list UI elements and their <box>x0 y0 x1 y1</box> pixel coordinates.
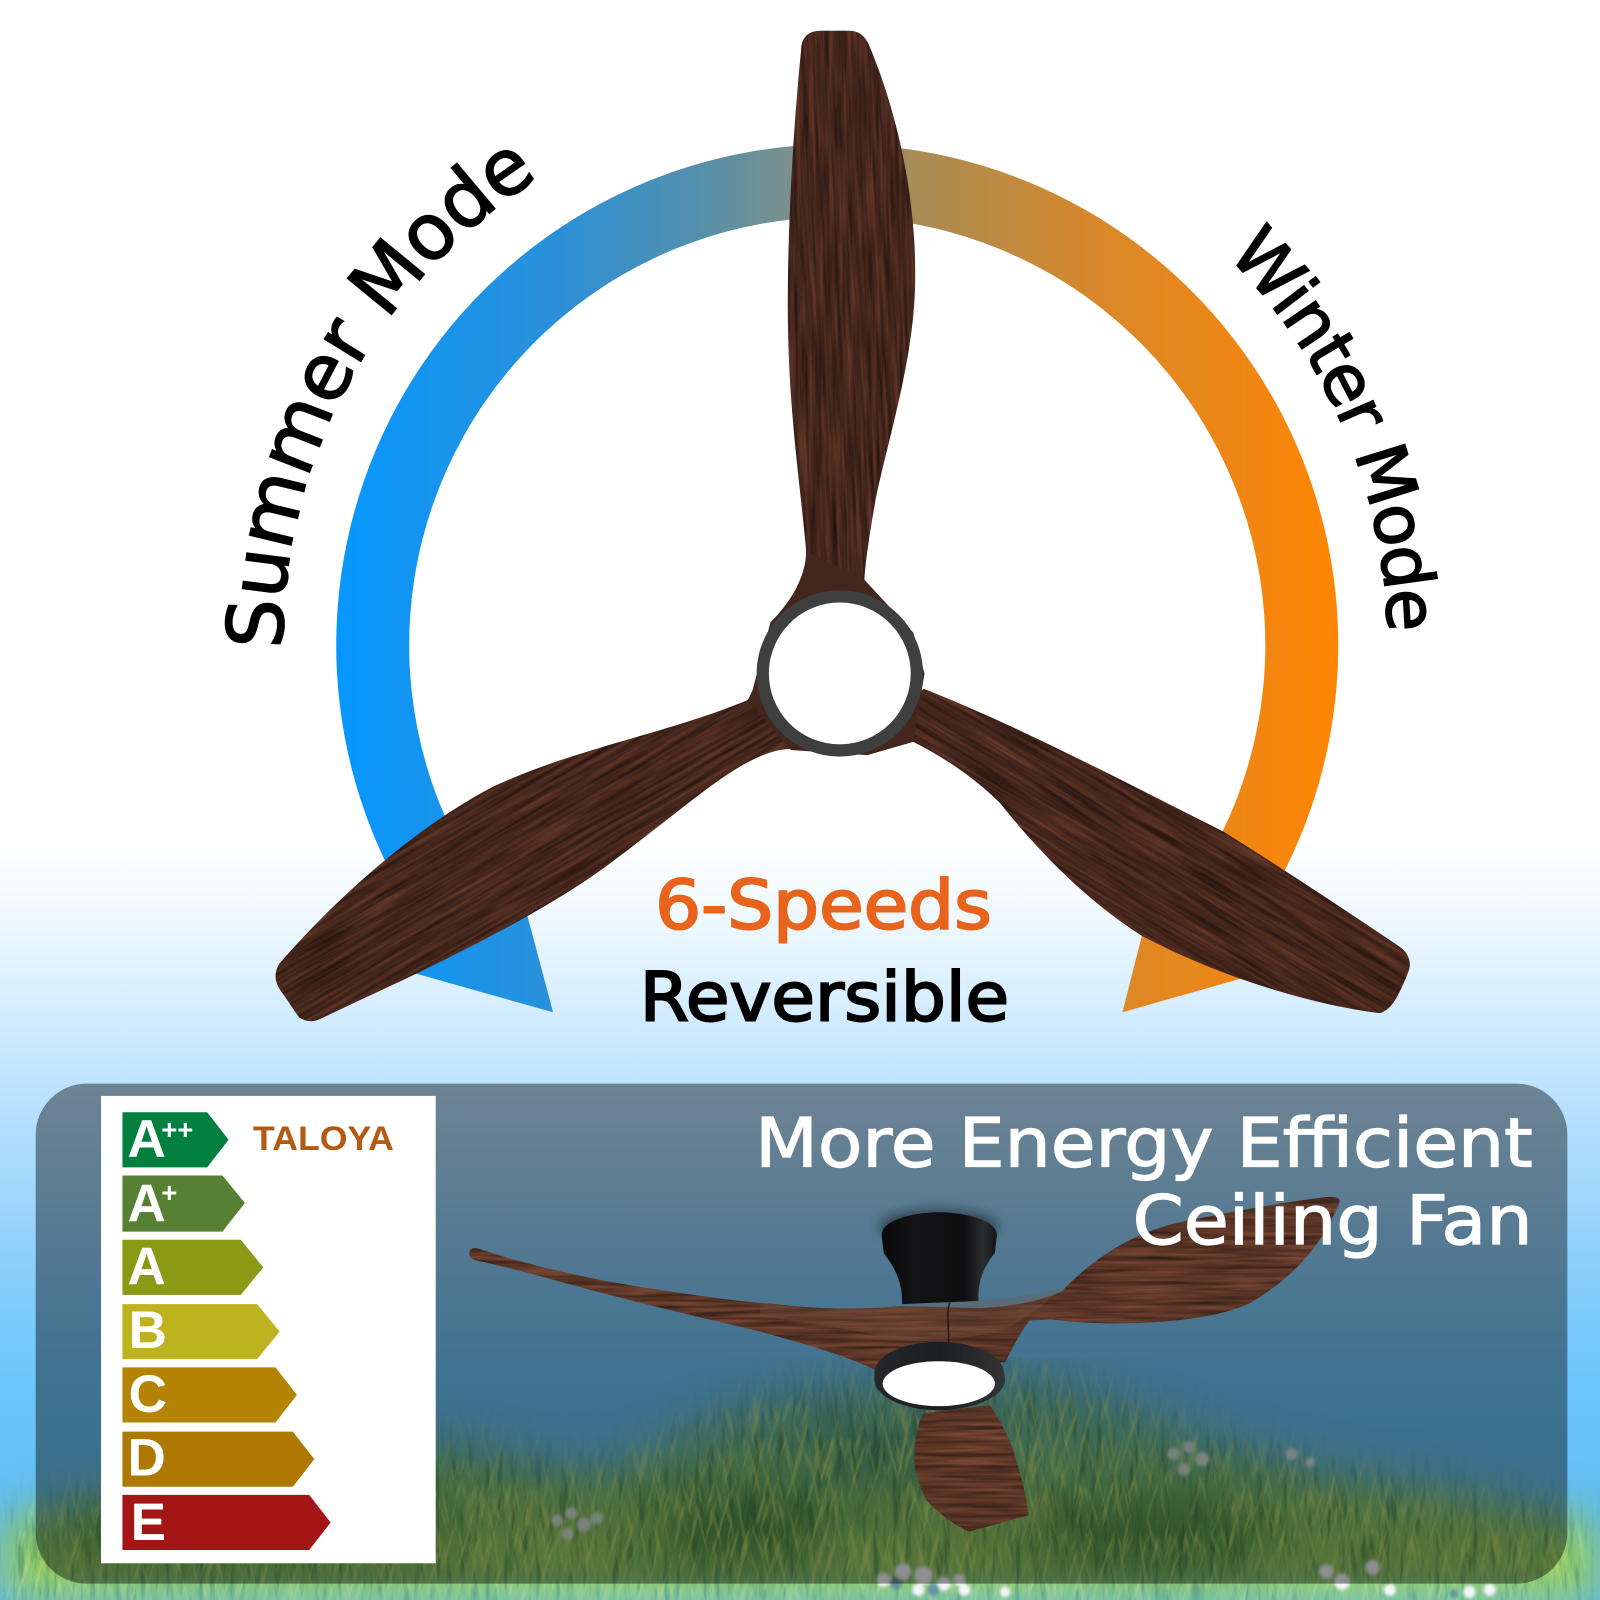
rating A++: A <box>128 1110 166 1169</box>
rating A <box>122 1238 263 1297</box>
rating D: D <box>128 1429 166 1488</box>
gradient mode ring with arrow ends <box>336 144 1338 1012</box>
label: Winter Mode: Winter Mode <box>1236 221 1438 629</box>
light disc <box>883 1361 995 1406</box>
flowers <box>551 1441 1496 1598</box>
side view ceiling fan <box>469 1196 1340 1532</box>
rating A+ <box>122 1174 245 1233</box>
rating B: B <box>129 1301 167 1360</box>
label: 6-Speeds: 6-Speeds <box>655 866 992 945</box>
hub seam <box>948 1302 950 1362</box>
blade: lower right <box>913 688 1410 1014</box>
rating A: A <box>128 1238 166 1297</box>
rating D <box>122 1429 314 1488</box>
blades <box>469 1196 1340 1532</box>
energy rating label card <box>101 1096 436 1563</box>
light cylinder <box>874 1342 1005 1410</box>
brand TALOYA: TALOYA <box>253 1120 394 1158</box>
hub wood body <box>750 551 924 755</box>
rating B <box>122 1301 280 1360</box>
rating A+: + <box>161 1177 177 1208</box>
hub ring and light <box>763 596 917 751</box>
canopy shadow <box>880 1210 998 1243</box>
grass hill scene <box>0 1357 1600 1600</box>
label: Reversible: Reversible <box>640 957 1009 1036</box>
rating A++: ++ <box>161 1114 193 1145</box>
rating C: C <box>129 1365 167 1424</box>
rating A+: A <box>128 1174 166 1233</box>
blade: top <box>788 30 916 580</box>
label: Summer Mode: Summer Mode <box>224 150 534 644</box>
blade: lower left <box>276 690 790 1022</box>
top view fan <box>155 0 1538 1162</box>
hub wood highlight <box>760 1288 1060 1341</box>
rating C <box>122 1365 297 1424</box>
rating E: E <box>131 1493 166 1552</box>
heading line 2: Ceiling Fan <box>1133 1181 1533 1260</box>
translucent dark panel <box>36 1084 1567 1584</box>
rating E <box>122 1493 331 1552</box>
canopy <box>882 1212 997 1304</box>
heading line 1: More Energy Efficient <box>755 1103 1533 1182</box>
rating A++ <box>122 1110 229 1169</box>
